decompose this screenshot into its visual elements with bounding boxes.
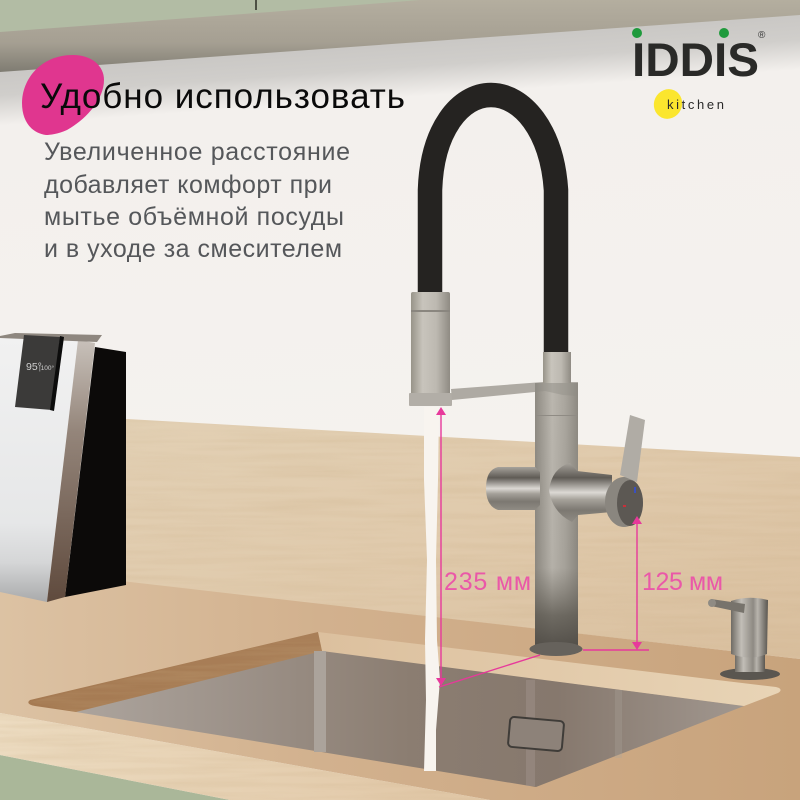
black rear — [65, 347, 126, 597]
wall background — [0, 0, 800, 470]
description text: Увеличенное расстояние — [44, 138, 350, 166]
cabinet front below counter — [0, 755, 230, 800]
countertop front edge — [0, 713, 490, 800]
green cabinet door — [0, 0, 420, 32]
dark left rim — [28, 632, 322, 712]
pink blob — [22, 55, 104, 135]
title: Удобно использовать — [40, 77, 405, 116]
countertop — [0, 567, 800, 800]
dimension 125 mm: 125 мм — [642, 568, 723, 596]
dimension 235 mm — [436, 407, 540, 687]
left knob — [486, 467, 540, 510]
dimension 235 mm: 235 мм — [444, 568, 531, 596]
lid — [0, 333, 102, 342]
basin highlights — [526, 680, 535, 786]
base — [530, 642, 582, 656]
arm — [451, 382, 578, 400]
yellow blob — [649, 84, 687, 124]
lever — [620, 415, 645, 482]
steel basin — [76, 650, 744, 787]
basin corner seam — [314, 651, 326, 752]
logo: kitchen — [667, 97, 724, 112]
collar — [543, 352, 571, 383]
right knob — [549, 463, 612, 522]
appliance — [0, 333, 126, 602]
handle disc — [605, 477, 643, 527]
description text: и в уходе за смесителем — [44, 235, 342, 263]
back rim — [318, 632, 781, 706]
description text: мытье объёмной посуды — [44, 203, 344, 231]
sink — [28, 632, 781, 787]
white front — [0, 338, 78, 602]
screen — [15, 335, 60, 410]
black hose — [430, 95, 556, 354]
cabinet underside — [0, 0, 800, 72]
logo wordmark: IDDIS — [632, 33, 759, 86]
description text: добавляет комфорт при — [44, 171, 332, 199]
body — [731, 598, 768, 658]
main body — [535, 383, 578, 647]
base plate — [720, 668, 780, 680]
description text — [44, 138, 350, 263]
faucet — [409, 95, 645, 656]
water stream — [424, 407, 440, 771]
logo: ® — [758, 30, 766, 41]
neck — [735, 655, 765, 672]
appliance: 95° — [26, 361, 42, 373]
spray head — [411, 292, 450, 395]
upper cabinet — [0, 0, 800, 72]
wood backsplash — [126, 419, 800, 659]
logo — [632, 28, 766, 124]
brown side — [47, 340, 95, 602]
dimension 125 mm — [583, 516, 723, 650]
spout — [711, 599, 745, 613]
overflow plate — [508, 717, 564, 751]
appliance: |100° — [39, 364, 55, 372]
soap dispenser — [708, 598, 780, 680]
